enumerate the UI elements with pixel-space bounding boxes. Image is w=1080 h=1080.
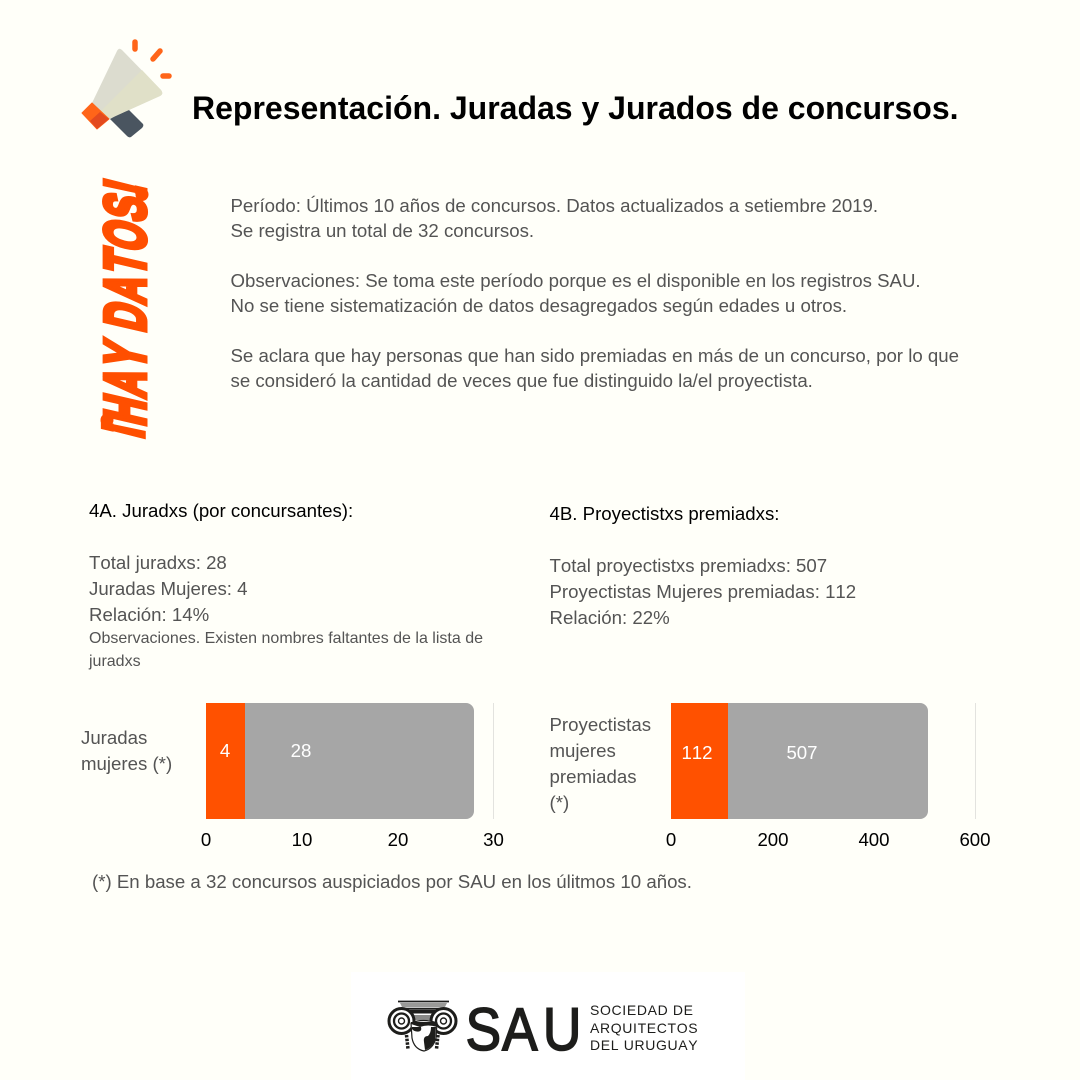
axis: 200 — [757, 829, 789, 850]
note: 4A observations: juradxs — [89, 653, 141, 670]
intro text: Se registra un total de 32 concursos. — [230, 220, 534, 241]
logo text: DEL URUGUAY — [590, 1037, 698, 1053]
stats: 4A — [89, 552, 248, 625]
bar: women — [671, 703, 728, 819]
note: 4A observations — [88, 630, 483, 670]
heading: 4B: 4B. Proyectistxs premiadxs: — [550, 503, 779, 524]
axis: 600 — [959, 829, 991, 850]
category label: mujeres (*) — [81, 753, 172, 774]
value: women: 112 — [681, 742, 713, 763]
axis — [666, 829, 991, 850]
intro text: se consideró la cantidad de veces que fue distinguido la/el proyectista. — [230, 370, 813, 391]
chart: 4A juradas — [81, 703, 504, 850]
stats: 4B: Total proyectistxs premiadxs: 507 — [550, 555, 827, 576]
category label: Proyectistas — [550, 714, 651, 735]
value: total: 507 — [786, 742, 818, 763]
category label — [81, 727, 172, 774]
bar: women — [206, 703, 245, 819]
stats: 4B: Relación: 22% — [550, 607, 670, 628]
axis: 0 — [666, 829, 676, 850]
intro text: Observaciones: Se toma este período porque es el disponible en los registros SAU. — [230, 270, 921, 291]
bar: total — [672, 703, 928, 819]
gridline — [975, 703, 976, 819]
title: Representación. Juradas y Jurados de concursos. — [192, 90, 958, 126]
category label: mujeres — [550, 740, 616, 761]
stats: 4A: Relación: 14% — [89, 604, 209, 625]
category label: Juradas — [81, 727, 147, 748]
axis — [201, 829, 504, 850]
intro text: Se aclara que hay personas que han sido premiadas en más de un concurso, por lo que — [230, 345, 959, 366]
chart: 4B proyectistas — [550, 703, 991, 850]
icon: ionic capital — [388, 1000, 458, 1052]
note: 4A observations: Observaciones. Existen nombres faltantes de la lista de — [89, 630, 483, 647]
slogan: hay datos: ¡ — [82, 413, 147, 441]
stats: 4B: Proyectistas Mujeres premiadas: 112 — [550, 581, 856, 602]
axis: 20 — [388, 829, 408, 850]
logo text: SOCIEDAD DE — [590, 1002, 694, 1018]
wordmark: SAU — [465, 997, 581, 1064]
stats: 4B — [550, 555, 856, 628]
axis: 30 — [483, 829, 504, 850]
axis: 10 — [292, 829, 312, 850]
heading: 4A: 4A. Juradxs (por concursantes): — [89, 500, 353, 521]
logo text — [590, 1002, 698, 1053]
category label: premiadas — [550, 766, 637, 787]
icon: megaphone — [82, 39, 172, 138]
value: total: 28 — [291, 740, 311, 761]
intro text: No se tiene sistematización de datos desagregados según edades u otros. — [230, 295, 847, 316]
slogan: hay datos: HAY DATOS! — [93, 172, 158, 430]
logo text: ARQUITECTOS — [590, 1020, 698, 1036]
intro text: Período: Últimos 10 años de concursos. Datos actualizados a setiembre 2019. — [230, 195, 878, 216]
bar: total — [207, 703, 474, 819]
intro text — [230, 195, 959, 391]
category label: (*) — [550, 792, 569, 813]
category label — [550, 714, 651, 813]
value: women: 4 — [220, 740, 230, 761]
axis: 400 — [858, 829, 890, 850]
logo: SAU — [351, 972, 745, 1080]
axis: 0 — [201, 829, 211, 850]
footnote: (*) En base a 32 concursos auspiciados por SAU en los úlitmos 10 años. — [92, 871, 692, 892]
gridline — [493, 703, 494, 819]
stats: 4A: Juradas Mujeres: 4 — [89, 578, 248, 599]
stats: 4A: Total juradxs: 28 — [89, 552, 227, 573]
